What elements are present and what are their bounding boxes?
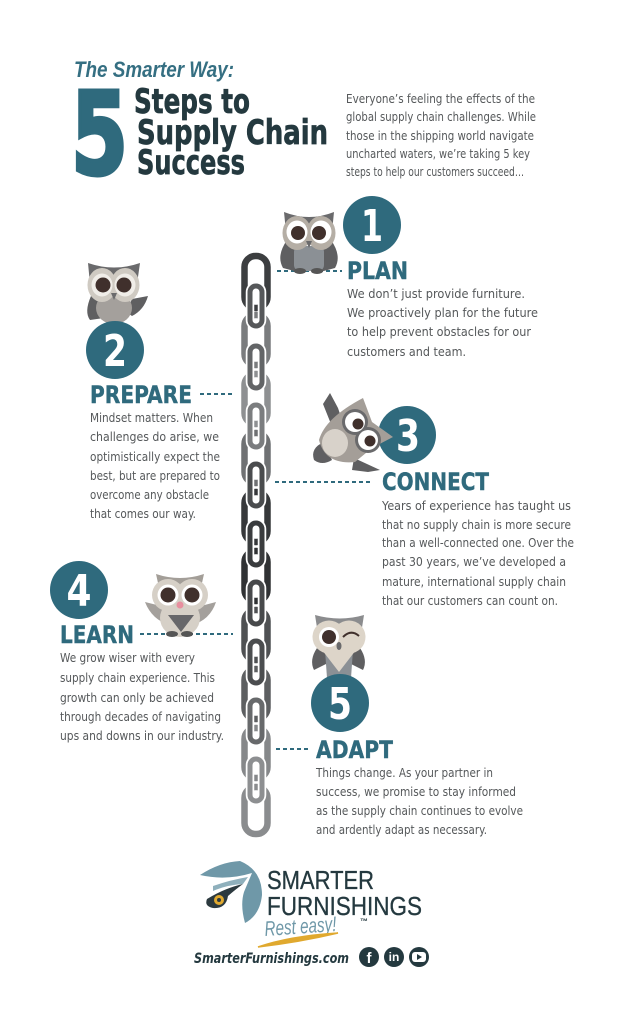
title block (71, 57, 328, 201)
number badge 1: 1 (361, 201, 383, 252)
body text: Mindset matters. When (90, 410, 213, 425)
body text: and ardently adapt as necessary. (316, 822, 487, 837)
wordmark: ™ (360, 917, 368, 926)
body text: as the supply chain continues to evolve (316, 803, 523, 818)
icon: facebook: f (366, 950, 372, 967)
intro paragraph: global supply chain challenges. While (346, 109, 536, 124)
body text: challenges do arise, we (90, 429, 219, 444)
tagline: Rest easy! (264, 913, 337, 941)
main title: Success (137, 143, 245, 183)
intro paragraph: Everyone’s feeling the effects of the (346, 91, 535, 106)
body text: than a well-connected one. Over the (382, 535, 574, 550)
number badge 5: 5 (328, 679, 352, 730)
step 1: plan (277, 196, 538, 359)
step 3: connect (275, 393, 574, 608)
wordmark: SMARTER (267, 865, 374, 895)
body text: growth can only be achieved (60, 690, 214, 705)
body text: that no supply chain is more secure (382, 517, 571, 532)
eyebrow heading: The Smarter Way: (74, 57, 234, 82)
body text: customers and team. (347, 344, 466, 359)
social icons (359, 947, 429, 967)
heading: prepare: PREPARE (90, 381, 192, 409)
heading: plan: PLAN (347, 257, 408, 285)
icon: owl 2 (87, 263, 148, 324)
body text (90, 410, 220, 521)
connector dashes (140, 633, 233, 635)
yellow swoosh (258, 933, 338, 947)
main title (134, 82, 328, 183)
connector dashes (277, 270, 342, 272)
number badge 2 (86, 321, 144, 379)
body text: Things change. As your partner in (315, 765, 493, 780)
connector dashes (200, 393, 234, 395)
number badge 2: 2 (103, 326, 127, 377)
number badge 1 (343, 196, 401, 254)
chain (244, 256, 268, 834)
body text: ups and downs in our industry. (60, 728, 224, 743)
body text: to help prevent obstacles for our (347, 324, 532, 339)
body text: supply chain experience. This (60, 670, 215, 685)
body text: Years of experience has taught us (381, 498, 571, 513)
body text: that comes our way. (90, 506, 196, 521)
intro paragraph: those in the shipping world navigate (346, 128, 534, 143)
wordmark (267, 865, 422, 926)
step 4: learn (50, 561, 233, 743)
intro paragraph: steps to help our customers succeed… (346, 164, 524, 179)
connector dashes (276, 748, 310, 750)
main title: Steps to (134, 82, 250, 122)
main title: Supply Chain (137, 113, 328, 153)
body text (381, 498, 574, 608)
body text: We proactively plan for the future (347, 305, 538, 320)
number badge 4: 4 (66, 566, 92, 617)
body text (60, 650, 224, 743)
step 5: adapt (276, 615, 523, 837)
body text: success, we promise to stay informed (316, 784, 516, 799)
body text: through decades of navigating (60, 709, 221, 724)
icon: owl 3 (313, 393, 393, 472)
logo (200, 861, 422, 947)
body text: We don’t just provide furniture. (347, 286, 525, 301)
website url: SmarterFurnishings.com (194, 951, 349, 967)
connector dashes (275, 481, 373, 483)
body text: that our customers can count on. (382, 593, 558, 608)
icon: owl 5 (312, 615, 366, 678)
heading: connect: CONNECT (382, 468, 490, 496)
wordmark: FURNISHINGS (267, 891, 422, 921)
big numeral 5: 5 (71, 68, 128, 201)
heading: adapt: ADAPT (316, 736, 394, 764)
icon: owl 1 (280, 212, 338, 274)
number badge 3 (378, 406, 436, 464)
body text (347, 286, 538, 359)
body text: We grow wiser with every (60, 650, 195, 665)
body text: best, but are prepared to (90, 468, 220, 483)
icon: linkedin: in (389, 950, 399, 964)
step 2: prepare (86, 263, 234, 521)
heading: learn: LEARN (60, 621, 134, 649)
body text: optimistically expect the (90, 449, 220, 464)
body text: overcome any obstacle (90, 487, 209, 502)
number badge 3: 3 (396, 411, 420, 462)
number badge 4 (50, 561, 108, 619)
intro paragraph: uncharted waters, we’re taking 5 key (346, 146, 530, 161)
intro paragraph (346, 91, 536, 179)
number badge 5 (311, 674, 369, 732)
body text: past 30 years, we’ve developed a (382, 554, 566, 569)
body text (315, 765, 523, 837)
body text: mature, international supply chain (382, 574, 566, 589)
icon: youtube (409, 947, 429, 967)
icon: owl eye emblem (200, 861, 262, 923)
icon: owl 4 (145, 574, 216, 637)
